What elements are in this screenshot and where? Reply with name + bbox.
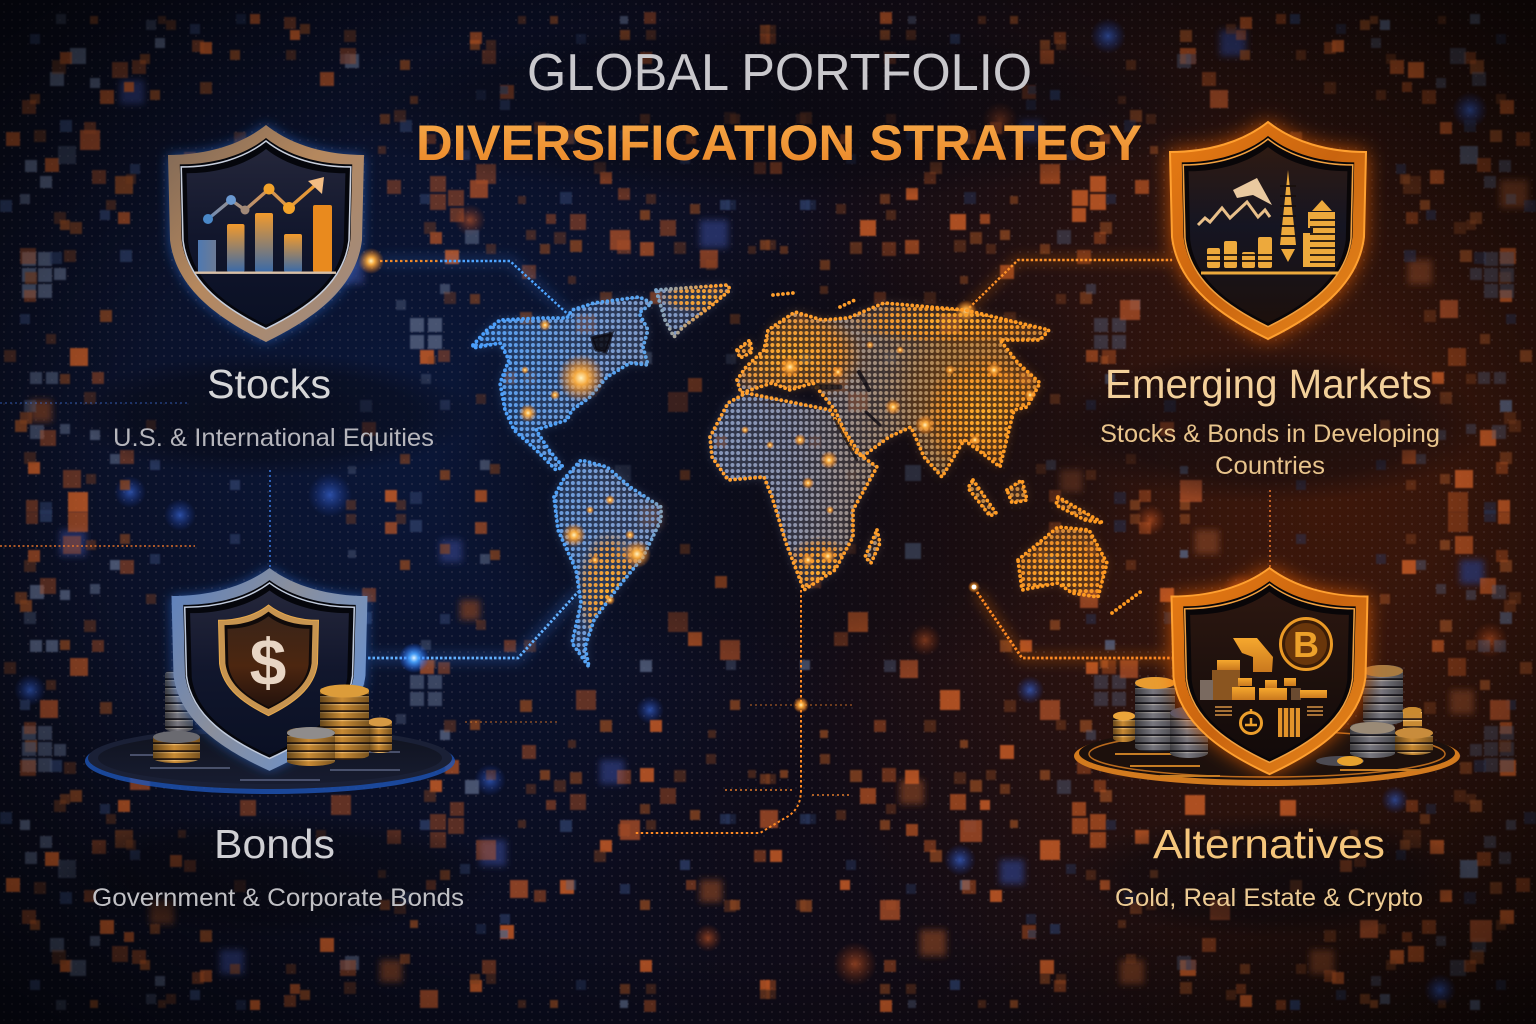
panel: stocks [113,125,434,452]
icon: bitcoin coin [1280,618,1332,670]
heading: stocks: Stocks [207,361,331,407]
connector: africa down [635,590,855,833]
title line 1: GLOBAL PORTFOLIO [527,44,1032,102]
connector: emerging markets to map [955,260,1172,322]
description: emerging markets: Countries [1215,452,1325,480]
heading: bonds: Bonds [214,821,335,867]
description: emerging markets: Stocks & Bonds in Developing [1100,420,1440,448]
connector: alternatives to map [968,581,1172,658]
panel: emerging markets [1100,122,1440,480]
continents dotted coast [473,285,1143,667]
icon: bonds shield [172,568,368,771]
inland seas [592,333,880,460]
coins behind shield: alternatives [1113,665,1422,758]
coin platform: alternatives [1074,726,1460,786]
title [416,44,1142,171]
continents dot fill [474,285,1106,664]
coins front: bonds [153,684,392,766]
description: stocks: U.S. & International Equities [113,424,434,452]
heading: alternatives: Alternatives [1153,821,1385,867]
skyline stripes [1207,186,1335,262]
icon: clock and bars [1215,707,1323,737]
icon: gold bars and property [1200,638,1327,700]
city lights [519,319,1036,605]
icon: alternatives shield [1172,568,1368,774]
dollar sign: $ [250,625,286,699]
icon: dollar badge [219,605,318,716]
map glow [471,282,1110,663]
world map [471,282,1142,668]
coins behind shield: bonds [165,670,193,732]
panel: alternatives [1074,568,1460,912]
icon: emerging markets shield [1170,122,1366,339]
icon: markets skyline [1198,170,1338,274]
connector: stocks to map [358,248,572,318]
icon: bitcoin coin: B [1293,624,1319,665]
title line 2: DIVERSIFICATION STRATEGY [416,115,1142,171]
coins front: alternatives [1316,722,1433,766]
icon: stocks shield [168,125,364,342]
description: emerging markets [1100,420,1440,480]
bar chart: stocks [195,177,336,274]
connector: faint side lines [0,403,1270,722]
description: bonds: Government & Corporate Bonds [92,884,464,912]
coin platform: bonds [85,727,455,794]
connector lines [0,248,1270,833]
panel: bonds [85,568,464,912]
connector: bonds to map [368,592,578,673]
heading: emerging markets: Emerging Markets [1105,361,1432,407]
description: alternatives: Gold, Real Estate & Crypto [1115,884,1423,912]
